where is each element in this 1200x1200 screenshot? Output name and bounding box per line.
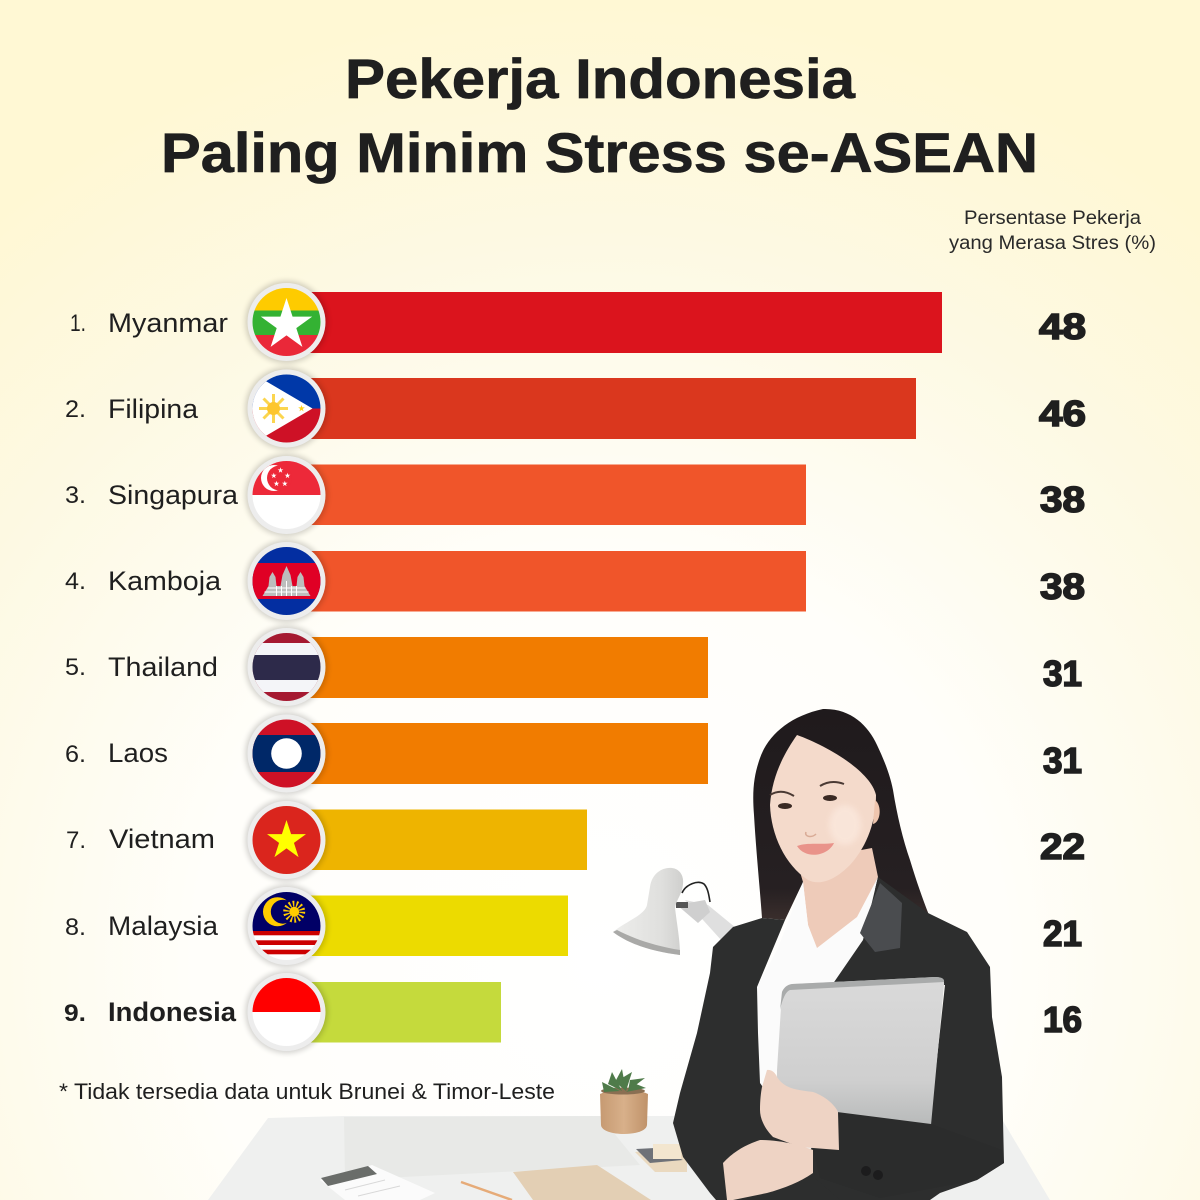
country names: Laos [108, 738, 168, 768]
values: 21 [1043, 913, 1082, 954]
icon: flag Malaysia [246, 885, 328, 967]
column header: percentage of stressed workers: Persentase Pekerja [964, 208, 1141, 229]
rank numbers: 8. [65, 914, 86, 941]
shirt [757, 877, 878, 1090]
country names: Vietnam [109, 824, 215, 854]
values: 16 [1043, 999, 1082, 1040]
values: 38 [1040, 566, 1085, 607]
desk with items [208, 1116, 1050, 1200]
bar: Filipina [305, 378, 916, 439]
bar: Laos [305, 723, 708, 784]
sleeve [813, 1112, 1004, 1198]
hair [753, 709, 929, 920]
icon: pencil [461, 1182, 512, 1200]
icon: desk lamp [613, 868, 736, 955]
hands [760, 1070, 839, 1150]
values: 31 [1043, 653, 1082, 694]
icon: flag Laos [246, 712, 328, 794]
values: 46 [1039, 393, 1086, 434]
country names: Kamboja [108, 566, 222, 596]
icon: flag Kamboja [246, 540, 328, 622]
values: 48 [1039, 306, 1086, 347]
bar chart [305, 292, 942, 1042]
country names: Singapura [108, 480, 239, 510]
country names [108, 308, 239, 1027]
rank numbers: 7. [66, 827, 86, 854]
bar: Singapura [305, 464, 806, 525]
country names: Indonesia [108, 997, 237, 1027]
bar: Indonesia [305, 982, 501, 1042]
rank numbers: 1. [70, 310, 86, 337]
icon: calculator [320, 1165, 435, 1200]
icon: notebook [513, 1165, 651, 1200]
bar: Malaysia [305, 896, 568, 956]
bar: Thailand [305, 637, 708, 698]
title: Pekerja Indonesia [345, 47, 856, 110]
country names: Malaysia [108, 911, 219, 941]
icon: potted plant [600, 1069, 648, 1134]
values: 22 [1040, 826, 1085, 867]
title: Paling Minim Stress se-ASEAN [161, 121, 1038, 184]
country names: Thailand [108, 652, 218, 682]
jacket [673, 918, 880, 1200]
rank numbers: 5. [65, 654, 86, 681]
values [1039, 306, 1086, 1040]
tablet [776, 977, 944, 1125]
icon: papers [635, 1144, 687, 1172]
bar: Kamboja [305, 551, 806, 612]
icon: flag Vietnam [246, 799, 328, 881]
icon: flag Myanmar [246, 281, 328, 363]
icon: flag Thailand [246, 626, 328, 708]
values: 31 [1043, 740, 1082, 781]
column header: percentage of stressed workers: yang Merasa Stres (%) [949, 233, 1156, 254]
bar: Vietnam [305, 810, 587, 870]
icon: flag Indonesia [246, 971, 328, 1053]
rank numbers: 2. [65, 396, 86, 423]
icon: flag Singapura [246, 454, 328, 536]
rank numbers [64, 310, 86, 1027]
rank numbers: 9. [64, 1000, 86, 1027]
face [770, 735, 880, 882]
title [161, 47, 1038, 184]
rank numbers: 4. [65, 568, 86, 595]
lapel [860, 883, 902, 952]
country names: Filipina [108, 394, 199, 424]
person: businesswoman holding tablet [673, 709, 1004, 1200]
rank numbers: 6. [65, 741, 86, 768]
rank numbers: 3. [65, 482, 86, 509]
icon: flag Filipina [246, 368, 328, 450]
bar: Myanmar [305, 292, 942, 353]
neck [797, 848, 878, 950]
values: 38 [1040, 479, 1085, 520]
column header: percentage of stressed workers [949, 208, 1156, 254]
country names: Myanmar [108, 308, 228, 338]
footnote: * Tidak tersedia data untuk Brunei & Timor-Leste [59, 1079, 555, 1104]
